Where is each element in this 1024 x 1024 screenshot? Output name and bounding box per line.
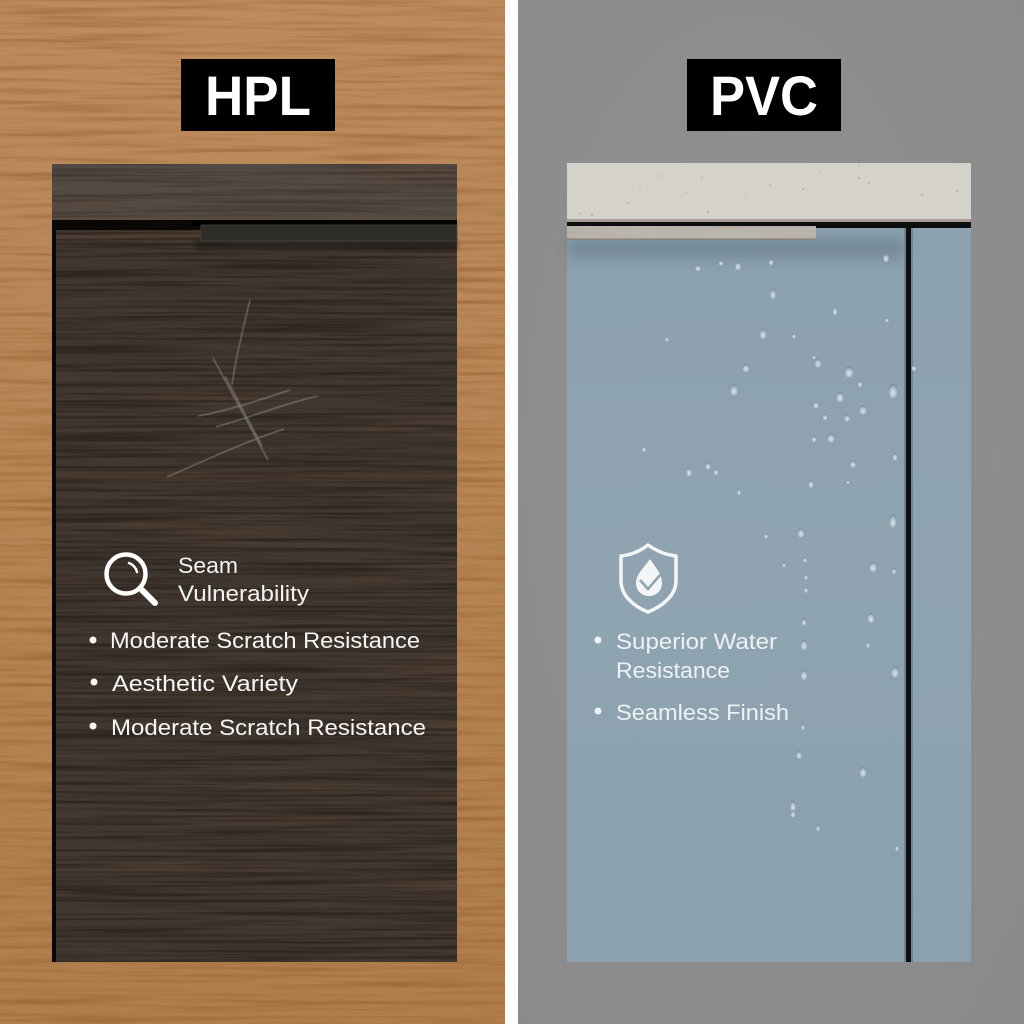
countertop: speckled stone band (567, 163, 971, 222)
heading: PVC: PVC (710, 64, 818, 127)
panel: PVC grey background (518, 0, 1024, 1024)
door top shading (567, 236, 905, 260)
icon: shield with water drop and check (621, 545, 676, 612)
bullet list: PVC features (594, 629, 789, 725)
shadow gap (567, 222, 971, 228)
bullet list: HPL features: Moderate Scratch Resistance (111, 715, 426, 740)
label: Seam Vulnerability: Vulnerability (178, 581, 310, 606)
handle shadow (195, 240, 457, 250)
bullet list: PVC features: Seamless Finish (616, 700, 789, 725)
door handle (201, 225, 457, 241)
bullet list: PVC features: Resistance (616, 658, 730, 683)
bullet list: HPL features: Aesthetic Variety (112, 671, 299, 696)
bullet list: HPL features (90, 628, 426, 740)
door handle (567, 226, 816, 240)
label: Seam Vulnerability (178, 553, 310, 606)
panel: HPL wood background (0, 0, 505, 1024)
panel: PVC cabinet (567, 163, 971, 962)
center divider (505, 0, 518, 1024)
scratch marks (167, 300, 318, 477)
water droplets (642, 254, 916, 851)
countertop: dark wood top band (52, 164, 457, 220)
heading: HPL (181, 59, 335, 131)
bullet list: PVC features: Superior Water (616, 629, 778, 654)
icon: magnifying glass (106, 554, 155, 603)
bullet list: HPL features: Moderate Scratch Resistance (110, 628, 420, 653)
cabinet door surface (56, 230, 457, 962)
heading: HPL: HPL (205, 64, 311, 127)
heading: PVC (687, 59, 841, 131)
label: Seam Vulnerability: Seam (178, 553, 238, 578)
panel: HPL cabinet (52, 164, 457, 962)
vertical door seam (904, 228, 913, 962)
